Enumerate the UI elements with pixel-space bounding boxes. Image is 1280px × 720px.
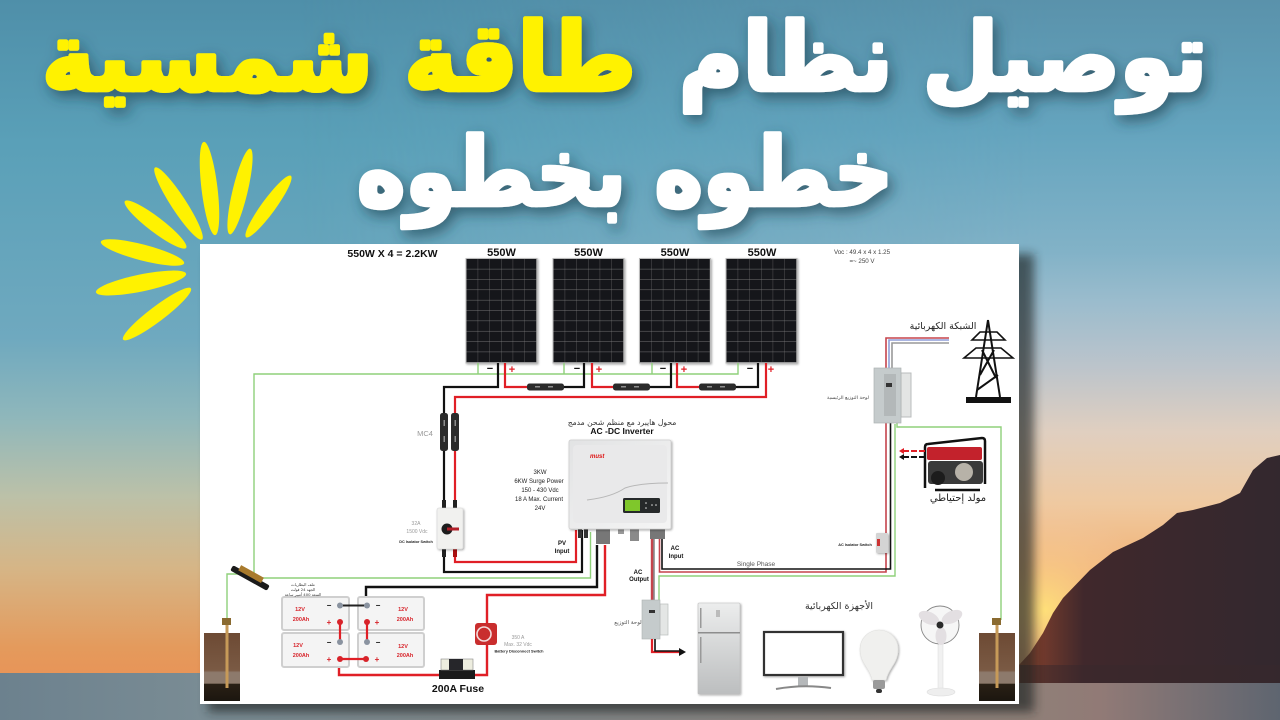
battery bank note [285, 582, 321, 597]
icon: monitor [764, 632, 843, 689]
inverter heading: AC -DC Inverter [590, 426, 654, 436]
polarity marks: − [574, 363, 580, 375]
diagram panel shadow [208, 254, 1034, 712]
port labels: Input [669, 554, 683, 560]
battery and ac wires [339, 545, 605, 675]
title: توصيل نظام [679, 4, 1207, 114]
dc isolator switch: 32A [412, 521, 421, 527]
port labels: PV [558, 541, 566, 547]
solar panels: 550W [487, 247, 516, 259]
port labels: Input [555, 549, 569, 555]
inverter [569, 440, 671, 544]
battery disconnect switch: 350 A [512, 635, 525, 641]
dc wires from panels [444, 363, 766, 572]
battery bank: + [327, 618, 332, 627]
main distribution panel [827, 368, 911, 423]
polarity marks: + [509, 364, 515, 376]
inverter heading: محول هايبرد مع منظم شحن مدمج [568, 418, 676, 427]
polarity marks: + [596, 364, 602, 376]
single phase label: Single Phase [737, 561, 776, 568]
battery bank: − [376, 601, 381, 610]
title [42, 4, 1207, 228]
inverter specs: 3KW [533, 470, 547, 476]
battery bank: − [376, 638, 381, 647]
solar panels: 550W [661, 247, 690, 259]
dc isolator switch [399, 500, 463, 557]
voc calculation: Voc : 49.4 x 4 x 1.25 [834, 249, 891, 256]
main distribution panel: لوحة التوزيع الرئيسية [827, 395, 870, 401]
battery bank note: ملف البطاريات [291, 582, 315, 587]
inverter specs: 24V [535, 506, 545, 512]
battery bank: 200Ah [293, 617, 310, 623]
battery bank: 12V [295, 607, 305, 613]
distribution board [614, 600, 686, 656]
green earth wires [227, 363, 1001, 620]
dc isolator switch: DC Isolator Switch [399, 540, 433, 544]
grid label: الشبكة الكهربائية [910, 321, 976, 332]
fuse: 200A Fuse [432, 683, 484, 695]
inverter specs: 150 - 430 Vdc [521, 488, 559, 494]
title: طاقة شمسية [42, 4, 636, 113]
sunburst decoration [94, 141, 297, 346]
inverter specs: 18 A Max. Current [515, 497, 563, 503]
earth busbar [230, 562, 272, 591]
ground rod right [979, 618, 1015, 701]
ac isolator switch: AC Isolator Switch [838, 543, 872, 547]
battery bank [282, 597, 424, 667]
battery bank: − [327, 601, 332, 610]
battery bank: 200Ah [397, 653, 414, 659]
polarity marks: − [660, 363, 666, 375]
port labels: Output [629, 577, 649, 583]
generator [899, 438, 985, 490]
battery disconnect switch: Battery Disconnect Switch [494, 648, 544, 654]
icon: transmission tower [964, 320, 1013, 403]
mc4 connectors [417, 384, 736, 451]
solar panels: 550W [748, 247, 777, 259]
battery bank: + [327, 655, 332, 664]
inverter: must [590, 454, 605, 460]
battery bank note: السعة 400 أمبير ساعة [285, 592, 321, 597]
polarity marks: − [747, 363, 753, 375]
icon: refrigerator [698, 603, 740, 694]
battery disconnect switch: Max. 32 Vdc [504, 642, 532, 648]
battery bank: − [327, 638, 332, 647]
fuse [432, 659, 484, 695]
battery disconnect switch [475, 623, 544, 654]
inverter specs: 6KW Surge Power [514, 479, 564, 485]
battery bank: 12V [398, 644, 408, 650]
icon: standing fan [916, 606, 965, 696]
inverter specs [514, 470, 564, 512]
solar panels [466, 247, 798, 364]
dc isolator switch: 1500 Vdc [406, 529, 428, 535]
battery bank: 200Ah [293, 653, 310, 659]
solar panels: 550W [574, 247, 603, 259]
polarity marks: + [681, 364, 687, 376]
port labels: AC [671, 546, 680, 552]
battery bank: + [375, 618, 380, 627]
generator label: مولد إحتياطي [930, 493, 986, 504]
ground rod left [204, 618, 240, 701]
diagram panel [200, 244, 1019, 704]
title: خطوه بخطوه [357, 119, 893, 228]
battery bank: 12V [398, 607, 408, 613]
polarity marks: + [768, 364, 774, 376]
mc4 connectors: MC4 [417, 429, 433, 438]
battery bank: 12V [293, 643, 303, 649]
icon: light bulb [860, 630, 898, 693]
distribution board: لوحة التوزيع [614, 620, 642, 626]
polarity marks: − [487, 363, 493, 375]
battery bank note: الجهد 24 فولت [291, 587, 315, 592]
battery bank: + [375, 655, 380, 664]
voc calculation: =~ 250 V [849, 258, 875, 265]
voc calculation [834, 249, 891, 265]
port labels: AC [634, 570, 643, 576]
ac isolator switch [838, 533, 888, 553]
appliances label: الأجهزة الكهربائية [805, 600, 873, 612]
port labels [555, 541, 683, 583]
battery bank: 200Ah [397, 617, 414, 623]
polarity marks [487, 363, 774, 376]
inverter heading [568, 418, 676, 436]
total array power label: 550W X 4 = 2.2KW [347, 248, 438, 260]
